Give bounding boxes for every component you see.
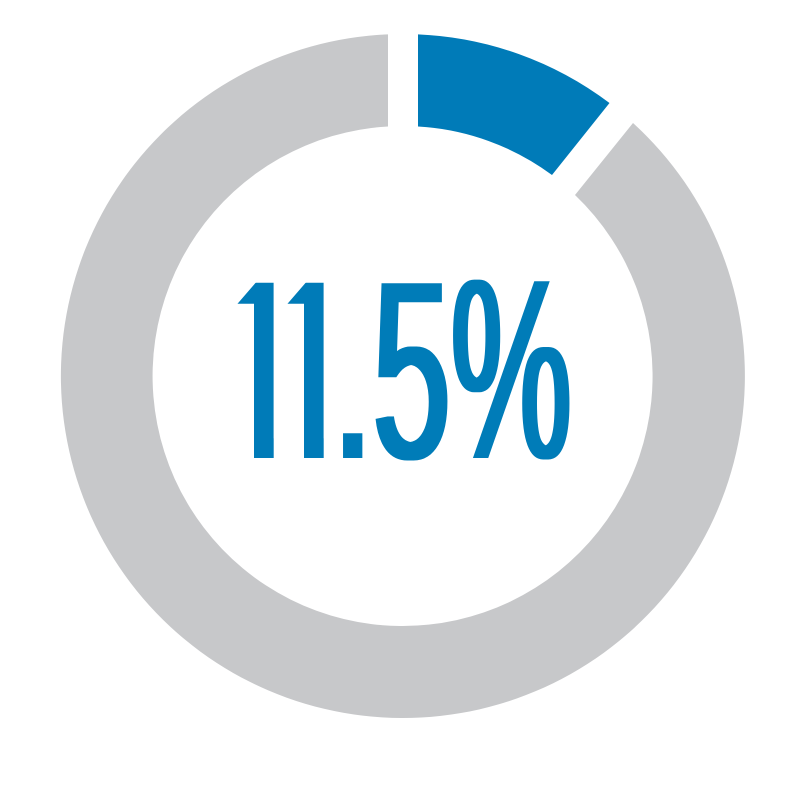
percentage value [237,280,570,460]
donut segment: remainder (grey) [61,34,745,718]
percentage value: % [451,226,572,513]
percentage value: 1 [198,203,322,542]
percentage value: 1 [248,203,372,542]
donut chart [60,34,745,718]
percentage value: . [324,249,381,508]
donut segment: 11.5% (blue) [418,34,610,175]
percentage value: 5 [373,230,450,513]
